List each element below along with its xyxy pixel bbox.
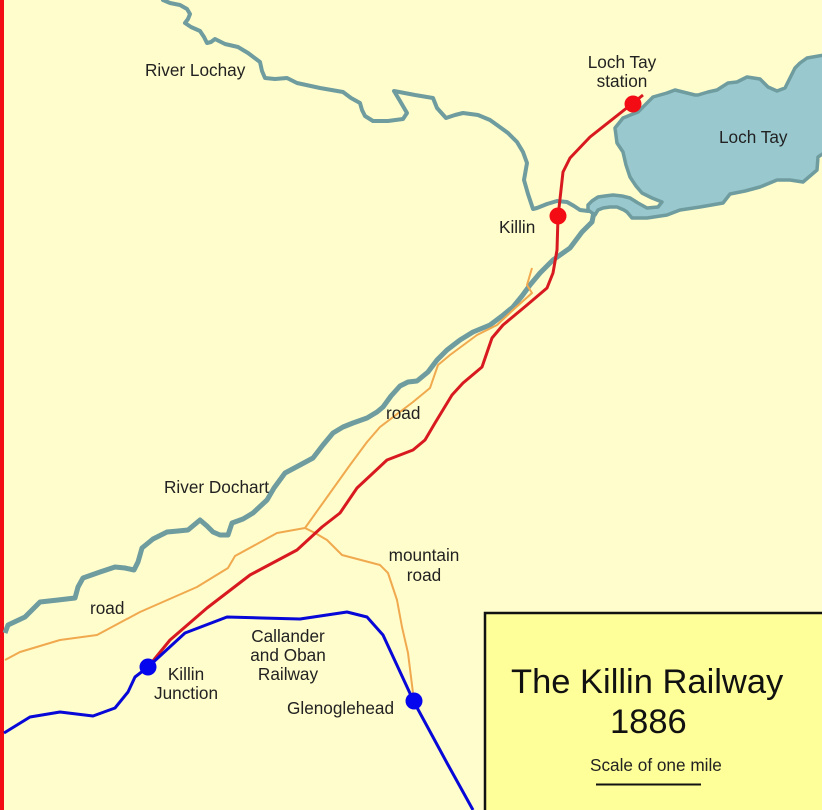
scale label: Scale of one mile	[590, 755, 722, 775]
station: Glenoglehead	[406, 692, 422, 710]
river: River Lochay	[163, 0, 588, 211]
label: Loch Tay: Loch Tay	[719, 127, 788, 147]
road: mountain road	[305, 528, 413, 693]
railway: Killin Railway	[148, 95, 643, 667]
label: Callander and Oban Railway: Callander	[251, 626, 325, 646]
label: Killin Junction: Killin	[168, 664, 204, 684]
label: mountain road: mountain	[389, 545, 459, 565]
station: Killin Junction	[140, 658, 156, 676]
station: Loch Tay	[624, 96, 642, 112]
label: road upper: road	[386, 403, 420, 423]
scale bar	[596, 784, 701, 786]
red left border	[0, 0, 4, 810]
label: Loch Tay station: Loch Tay	[588, 52, 657, 72]
title: The Killin Railway	[511, 663, 784, 701]
label: Loch Tay station: station	[597, 71, 647, 91]
label: Killin Junction: Junction	[154, 683, 218, 703]
label: Killin: Killin	[499, 217, 535, 237]
title: 1886	[610, 703, 687, 741]
title panel	[485, 613, 822, 810]
road: main road	[5, 268, 532, 660]
railway: Callander and Oban Railway	[4, 612, 473, 810]
label: Callander and Oban Railway: Railway	[258, 664, 318, 684]
label: Glenoglehead: Glenoglehead	[287, 698, 394, 718]
lake: Loch Tay	[588, 55, 822, 218]
road network	[5, 268, 532, 693]
label: River Dochart: River Dochart	[164, 477, 269, 497]
station: Killin	[550, 208, 566, 224]
river: River Dochart	[5, 212, 594, 633]
label: River Lochay: River Lochay	[145, 60, 246, 80]
label: road lower: road	[90, 598, 124, 618]
label: Callander and Oban Railway: and Oban	[250, 645, 326, 665]
label: mountain road: road	[407, 565, 441, 585]
